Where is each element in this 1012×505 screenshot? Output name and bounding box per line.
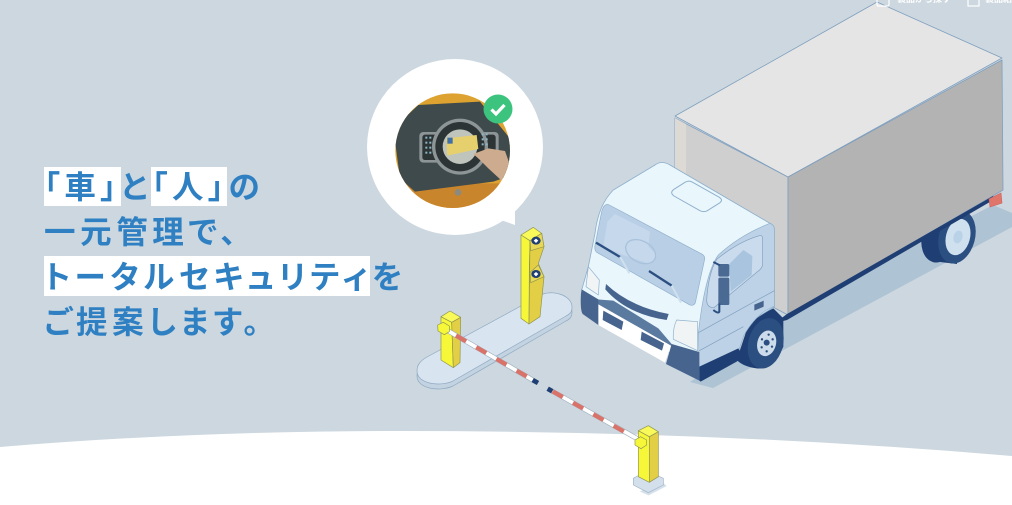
post base	[633, 476, 667, 495]
under cab	[699, 348, 743, 382]
bumper bar	[597, 299, 672, 346]
card reader photo	[395, 93, 510, 208]
barrier arm far	[548, 389, 638, 439]
heading line 4: ご提案します。	[44, 304, 264, 340]
lower white panel	[597, 300, 672, 363]
headlights	[586, 267, 698, 351]
front wheel	[737, 308, 789, 373]
highlight: car	[44, 167, 121, 206]
bumper ends	[581, 289, 598, 325]
highlight: person	[151, 167, 227, 206]
security gate and barrier	[438, 227, 667, 495]
truck shadow	[690, 205, 1012, 388]
nav icons	[877, 0, 979, 6]
windshield reflection	[603, 214, 657, 264]
speech bubble	[367, 59, 543, 235]
cab window reflection	[729, 250, 752, 292]
grille	[605, 284, 669, 320]
cab body	[582, 162, 774, 373]
wipers	[596, 243, 672, 286]
side window	[707, 236, 763, 308]
left barrier post	[441, 311, 461, 368]
truck cargo box	[675, 2, 1003, 315]
rear wheel	[916, 205, 981, 268]
heading line 2: 一元管理で、	[44, 214, 241, 250]
heading line 3: トータルセキュリティを	[44, 259, 407, 295]
mirror	[713, 262, 729, 313]
highlight: total security	[44, 256, 370, 296]
right barrier post	[633, 426, 667, 495]
gate island	[417, 293, 572, 389]
truck chassis strip	[775, 196, 995, 323]
door handle	[754, 301, 764, 311]
door lines	[698, 291, 774, 351]
heading line 1: 「車」と「人」の	[44, 169, 264, 205]
check badge	[484, 94, 512, 124]
heading highlights	[44, 167, 370, 296]
barrier arm near	[448, 331, 538, 383]
roof vent	[672, 181, 722, 212]
cab side panel	[698, 223, 774, 372]
tall card reader	[521, 227, 544, 324]
truck cab	[581, 162, 789, 382]
tail lamp	[989, 193, 1002, 207]
left arm hinge	[438, 322, 449, 335]
windshield	[595, 205, 705, 305]
white ground curve	[0, 431, 1012, 505]
reader badges	[531, 237, 541, 278]
fog lamps	[603, 311, 623, 330]
